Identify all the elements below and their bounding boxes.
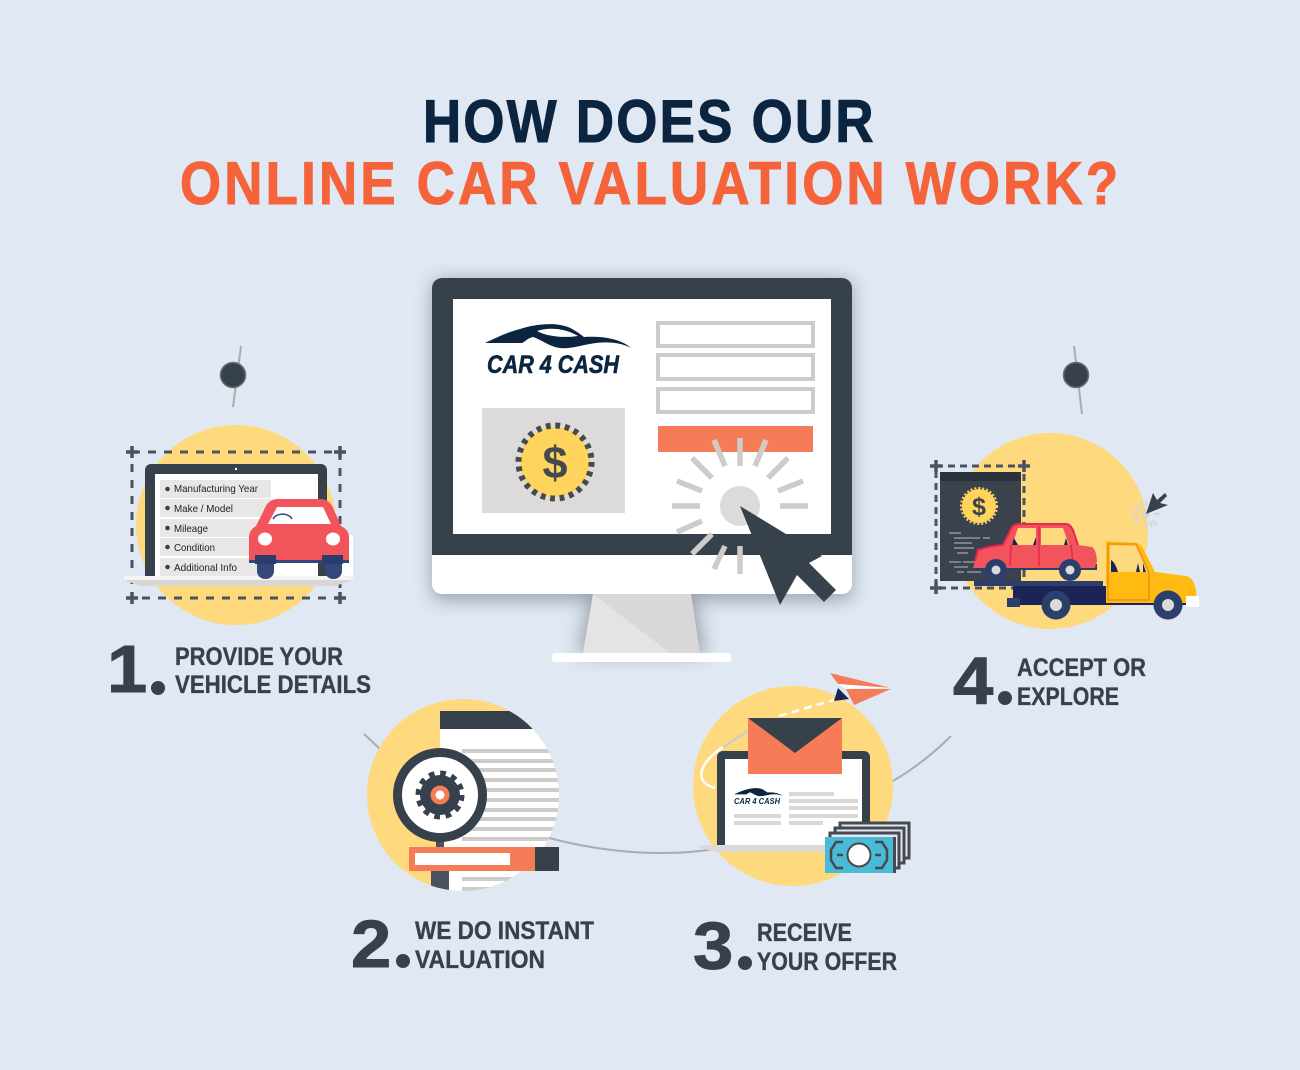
monitor frame (432, 278, 852, 594)
step 1 label: PROVIDE YOUR (175, 643, 343, 671)
monitor screen (453, 299, 831, 534)
form list: Make / Model (174, 503, 233, 515)
step 4 label (1017, 654, 1146, 711)
yellow circle (367, 699, 559, 891)
monitor shadow (432, 280, 852, 655)
form list: Condition (174, 542, 215, 554)
step 1 label: VEHICLE DETAILS (175, 671, 371, 699)
tow truck (974, 541, 1199, 620)
form list (160, 480, 271, 576)
step 3 number: 3 (693, 908, 733, 983)
search bar (409, 847, 559, 871)
step 3 label: YOUR OFFER (757, 948, 897, 976)
small logo (734, 788, 783, 806)
laptop (700, 751, 870, 852)
paper plane (830, 673, 891, 705)
title (180, 88, 1118, 217)
red car front view (249, 499, 353, 579)
magnifier with gear (398, 752, 482, 848)
pin (220, 346, 246, 407)
money stack (825, 823, 909, 873)
form list: Additional Info (174, 562, 237, 574)
yellow circle (952, 433, 1148, 629)
envelope (748, 718, 842, 774)
monitor illustration (432, 278, 852, 662)
click burst (672, 438, 808, 574)
document (431, 711, 565, 894)
form list: Manufacturing Year (174, 483, 258, 495)
laptop (124, 464, 353, 586)
step 4 label: EXPLORE (1017, 683, 1119, 711)
form list: Mileage (174, 523, 208, 535)
step 2 number: 2 (351, 906, 391, 981)
step 1 label (175, 643, 371, 699)
offer document: $ (972, 493, 986, 521)
step 2 label (415, 917, 594, 974)
pin (1064, 346, 1088, 414)
step 2 number (351, 906, 410, 981)
step 3 label (757, 919, 897, 976)
step 4 number (953, 643, 1012, 718)
small logo: CAR 4 CASH (734, 796, 781, 806)
yellow circle (136, 425, 336, 625)
cursor arrow (740, 506, 836, 605)
Car 4 Cash logo (485, 324, 631, 379)
step 1 number: 1 (107, 631, 147, 706)
red car on truck (973, 524, 1097, 581)
step 1 (107, 346, 371, 706)
step 3 (693, 673, 909, 983)
form fields (658, 323, 813, 412)
yellow circle (693, 686, 893, 886)
monitor stand (552, 594, 731, 662)
dashed frame (930, 460, 1030, 594)
flight path (701, 700, 834, 788)
small cursor with burst (1131, 493, 1168, 529)
step 2 (351, 699, 594, 981)
text lines (734, 792, 858, 825)
price panel with coin (482, 408, 625, 513)
step 4 label: ACCEPT OR (1017, 654, 1146, 682)
dashed frame (126, 446, 346, 604)
step 1 number (107, 631, 165, 706)
orange button (658, 426, 813, 452)
step 4 (930, 346, 1199, 718)
step 3 number (693, 908, 752, 983)
title: ONLINE CAR VALUATION WORK? (180, 150, 1118, 217)
price panel with coin: $ (542, 437, 568, 488)
title: HOW DOES OUR (423, 88, 874, 155)
step 3 label: RECEIVE (757, 919, 852, 947)
step 4 number: 4 (953, 643, 993, 718)
offer document (940, 472, 1021, 581)
step 2 label: WE DO INSTANT (415, 917, 594, 945)
connector lines between steps (364, 734, 951, 853)
Car 4 Cash logo: CAR 4 CASH (487, 351, 620, 379)
step 2 label: VALUATION (415, 946, 545, 974)
